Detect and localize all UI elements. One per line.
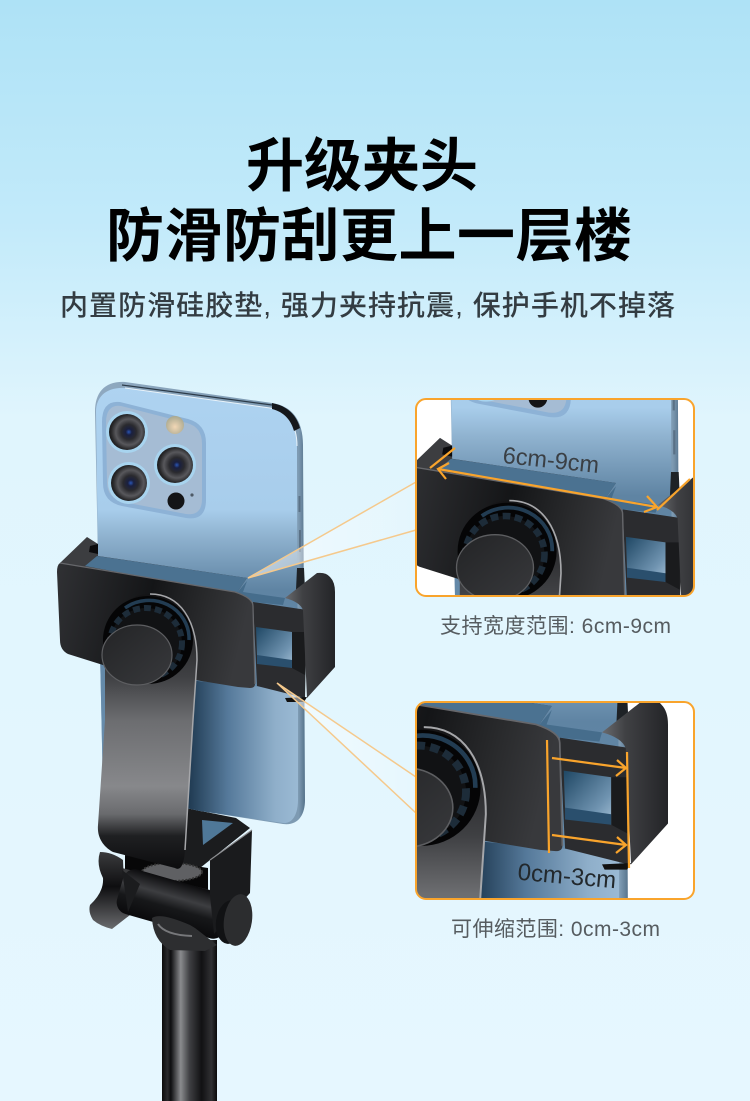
enlarged clamp view: width [417, 400, 693, 595]
callout cone: upper [248, 482, 416, 578]
stand joint and pole [89, 808, 255, 1101]
panel border [416, 702, 694, 899]
width value: 6cm-9cm [502, 442, 600, 478]
phone on clamp [57, 382, 335, 869]
title: 防滑防刮更上一层楼 [106, 204, 632, 269]
panel: extension range [415, 701, 695, 900]
panel: width range [415, 398, 695, 597]
extension arrows [547, 740, 629, 868]
width arrow [430, 448, 690, 512]
caption: width range: 支持宽度范围: 6cm-9cm [440, 615, 671, 638]
enlarged clamp view: extension [417, 703, 668, 898]
extension value: 0cm-3cm [517, 859, 617, 894]
title: 升级夹头 [246, 134, 478, 199]
caption: extension range: 可伸缩范围: 0cm-3cm [451, 918, 660, 941]
panel border [416, 399, 694, 596]
title [106, 134, 632, 269]
callout cone: lower [277, 683, 416, 813]
subtitle: 内置防滑硅胶垫, 强力夹持抗震, 保护手机不掉落 [60, 290, 675, 321]
